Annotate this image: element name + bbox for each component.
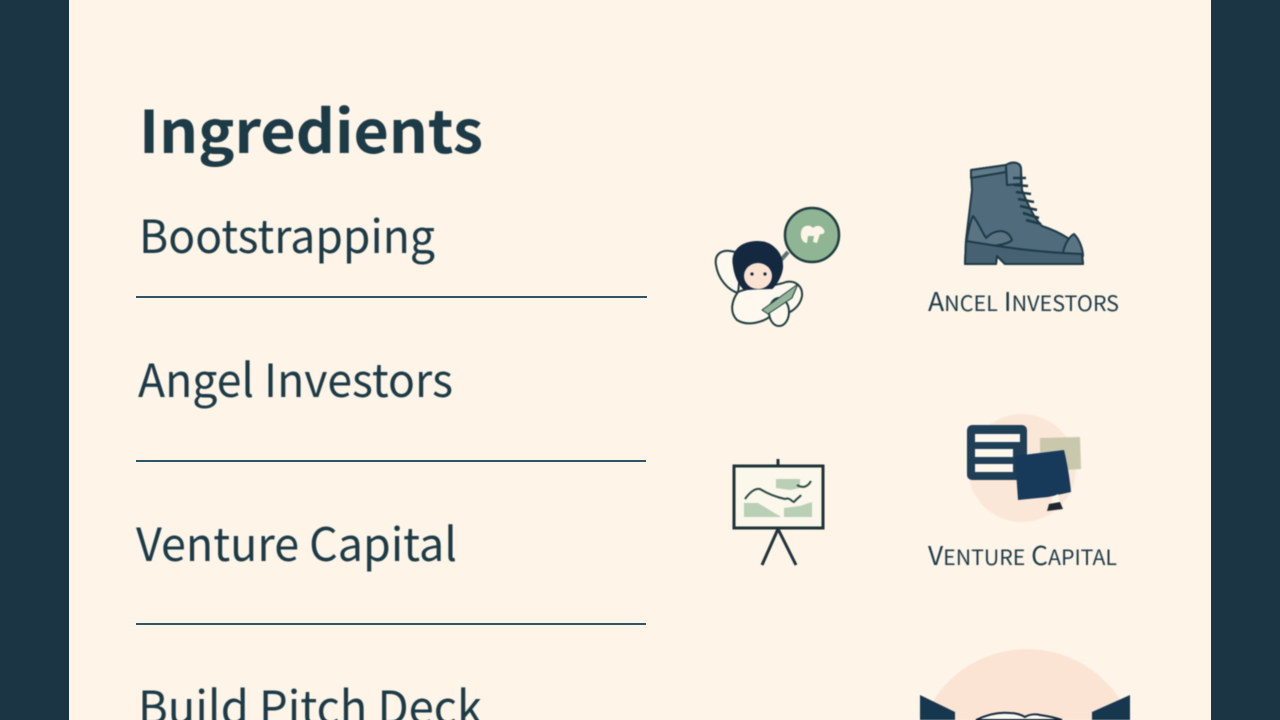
heading: Ingredients: Ingredients [139, 85, 483, 170]
label: Angel Investors: ANCEL INVESTORS [928, 282, 1119, 319]
icon: boot [965, 163, 1083, 264]
icon: presentation easel [734, 459, 823, 565]
icon: angel with coin balloon [716, 208, 839, 326]
list item: Venture Capital: Venture Capital [136, 509, 457, 575]
icon: handshake [920, 649, 1130, 720]
icon: documents and monitor [967, 414, 1081, 522]
list item: Angel Investors: Angel Investors [138, 345, 453, 411]
label: Venture Capital: VENTURE CAPITAL [928, 536, 1117, 573]
list item: Bootstrapping: Bootstrapping [139, 201, 435, 267]
